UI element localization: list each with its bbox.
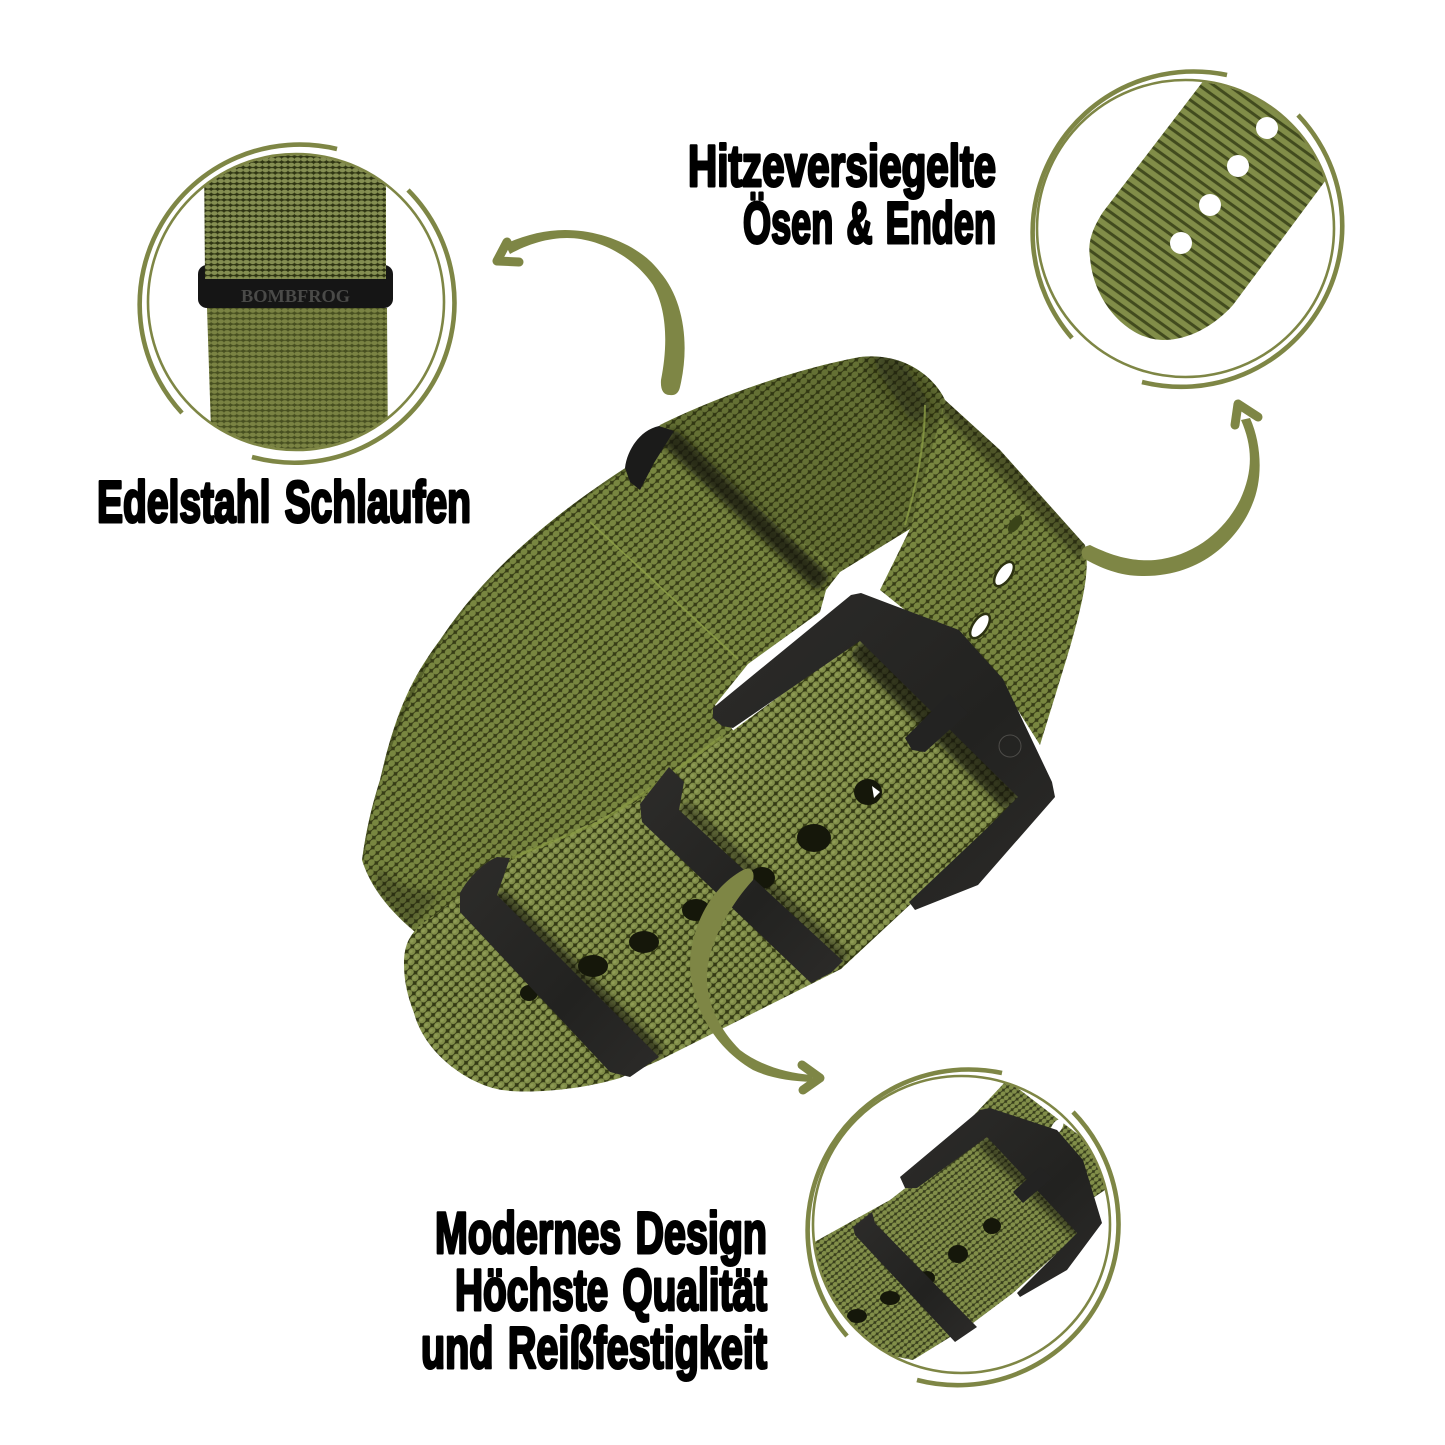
strap behind buckle xyxy=(973,1084,1105,1198)
arrow: to sealed eyelet detail xyxy=(1082,404,1260,576)
tongue xyxy=(1013,1180,1038,1203)
detail circle: stainless keeper xyxy=(140,145,454,463)
buckle tongue xyxy=(905,694,968,752)
buckle xyxy=(900,1108,1102,1297)
rounded strap end with holes xyxy=(1089,82,1325,340)
infographic canvas xyxy=(98,69,1345,1388)
front strap with tail xyxy=(404,630,1025,1092)
heading: Hitzeversiegelte Ösen & Enden xyxy=(688,134,996,256)
stitching line xyxy=(590,522,738,659)
buckle logo xyxy=(999,735,1021,757)
metal keeper loop, lower xyxy=(460,857,659,1077)
metal keeper loop, upper left xyxy=(625,426,674,490)
heading: Modernes Design Höchste Qualität und Reißfestigkeit: Modernes Design xyxy=(435,1201,767,1266)
lower keeper xyxy=(853,1212,977,1342)
front strap xyxy=(815,1144,1077,1360)
heading: Modernes Design Höchste Qualität und Reißfestigkeit: Höchste Qualität xyxy=(455,1258,767,1323)
arrow: to strap loop detail xyxy=(497,230,685,395)
metal keeper loop, upper xyxy=(640,767,843,983)
heading: Modernes Design Höchste Qualität und Reißfestigkeit xyxy=(421,1201,767,1381)
black keeper band xyxy=(198,265,393,308)
detail circle: buckle close-up xyxy=(800,1070,1119,1385)
heading: Modernes Design Höchste Qualität und Reißfestigkeit: und Reißfestigkeit xyxy=(421,1316,767,1381)
heading: Hitzeversiegelte Ösen & Enden: Ösen & Enden xyxy=(743,191,996,256)
main outer band xyxy=(362,350,945,932)
buckle xyxy=(713,593,1055,910)
heading: Edelstahl Schlaufen: Edelstahl Schlaufen xyxy=(97,470,471,535)
rings xyxy=(808,1070,1119,1385)
strap holes xyxy=(847,1218,1001,1323)
woven strap close-up xyxy=(204,150,388,460)
strap holes xyxy=(520,779,882,1001)
arrow: to buckle detail xyxy=(690,869,820,1090)
BOMBFROG engraving: BOMBFROG xyxy=(241,286,350,306)
rings xyxy=(140,145,454,463)
shaded upper band xyxy=(660,356,945,572)
heading: Hitzeversiegelte Ösen & Enden: Hitzeversiegelte xyxy=(688,134,996,199)
rings xyxy=(1033,72,1342,387)
detail circle: heat-sealed eyelets xyxy=(1030,69,1345,390)
main product: watch strap xyxy=(362,350,1090,1092)
back strap end with holes xyxy=(880,395,1090,745)
